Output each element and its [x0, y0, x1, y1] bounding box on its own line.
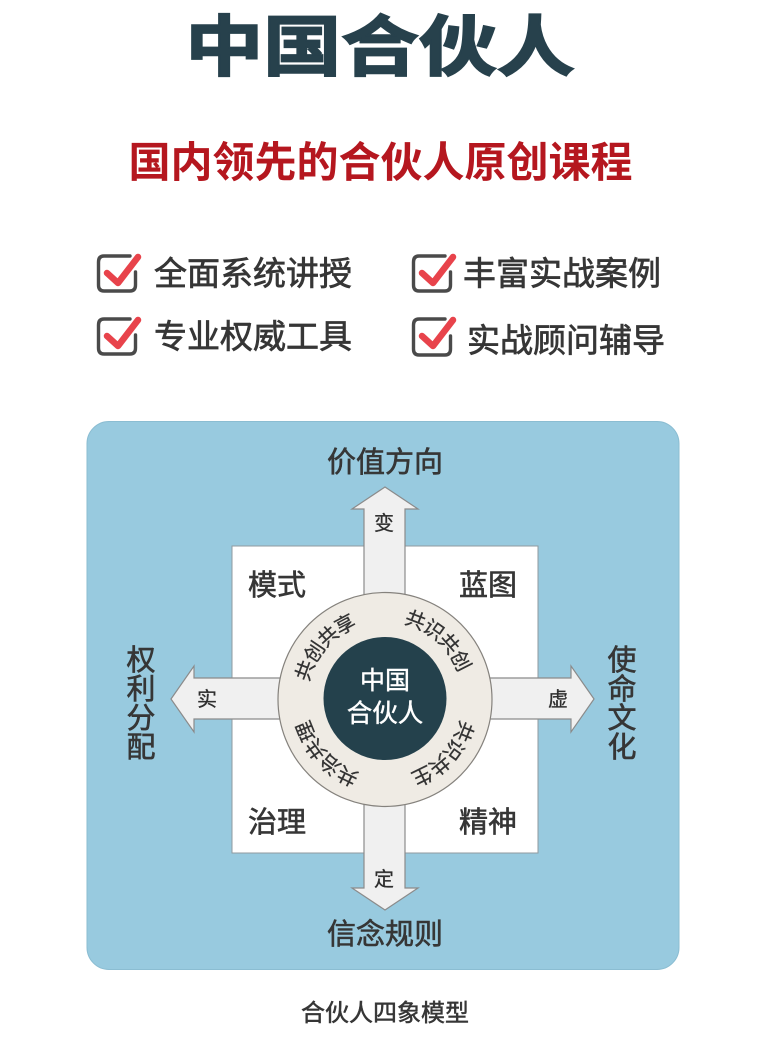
feature: 专业权威工具: 专业权威工具 [154, 318, 352, 355]
ring text: 共创共享: 享 [331, 610, 360, 640]
ring text: 共识共生: 共 [449, 718, 478, 745]
ring text: 共识共生: 识 [438, 734, 468, 763]
caption: 合伙人四象模型 [301, 1000, 469, 1027]
ring text: 共识共创: 共 [402, 606, 429, 635]
ring text: 共治共理 [293, 718, 362, 790]
feature list [98, 255, 665, 359]
subtitle: 国内领先的合伙人原创课程 [128, 139, 633, 186]
arrow: up: 变 [374, 512, 394, 535]
white quadrant square [232, 546, 538, 853]
quadrant label: top-right: 蓝图 [459, 569, 517, 602]
center circle [324, 637, 446, 760]
axis label: left: 分 [126, 703, 156, 735]
ring text: 共创共享: 创 [300, 638, 330, 667]
ring text: 共创共享 [291, 610, 360, 684]
ring text: 共治共理: 共 [301, 734, 332, 764]
center circle: 中国 [360, 667, 410, 695]
arrow: down [352, 800, 418, 910]
ring text: 共识共创: 创 [446, 647, 475, 675]
arrow: down: 定 [374, 868, 394, 891]
axis label: right: 化 [607, 731, 637, 764]
axis label: left: 配 [126, 732, 156, 764]
feature: 丰富实战案例: 丰富实战案例 [463, 255, 661, 292]
ring text: 共识共生 [408, 718, 478, 790]
feature: 全面系统讲授: 全面系统讲授 [154, 255, 352, 292]
axis label: right: 使 [607, 644, 637, 677]
ring text: 共识共创: 识 [419, 616, 448, 645]
ring text: 共识共生: 生 [408, 761, 436, 790]
axis label: left: 利 [126, 673, 156, 706]
axis label: right: 文 [607, 702, 637, 735]
center circle: 合伙人 [347, 700, 423, 728]
ring text: 共治共理: 理 [293, 718, 321, 744]
arrow: right [485, 666, 594, 732]
ring text: 共识共创 [402, 606, 475, 675]
arrow: up [352, 487, 418, 600]
arrow: left [171, 666, 285, 732]
title: 中国合伙人 [185, 11, 575, 85]
axis label: left: 权 [126, 644, 156, 677]
axis label: right: 命 [607, 673, 637, 706]
quadrant label: bottom-left: 治理 [248, 806, 306, 839]
ring text: 共治共理: 治 [316, 749, 346, 779]
arrow: right: 虚 [548, 688, 568, 711]
axis label: top: 价值方向 [327, 446, 443, 479]
panel: four-quadrant model [87, 422, 679, 970]
ring text: 共识共创: 共 [434, 629, 464, 659]
outer ring [278, 592, 492, 806]
arrow: left: 实 [197, 688, 217, 711]
feature: 实战顾问辅导: 实战顾问辅导 [467, 322, 665, 359]
ring text: 共创共享: 共 [291, 657, 320, 684]
ring text: 共治共理: 共 [334, 761, 362, 790]
ring text: 共识共生: 共 [424, 749, 454, 779]
axis label: bottom: 信念规则 [327, 918, 443, 951]
quadrant label: bottom-right: 精神 [459, 806, 517, 839]
ring text: 共创共享: 共 [313, 621, 344, 652]
quadrant label: top-left: 模式 [248, 569, 306, 602]
